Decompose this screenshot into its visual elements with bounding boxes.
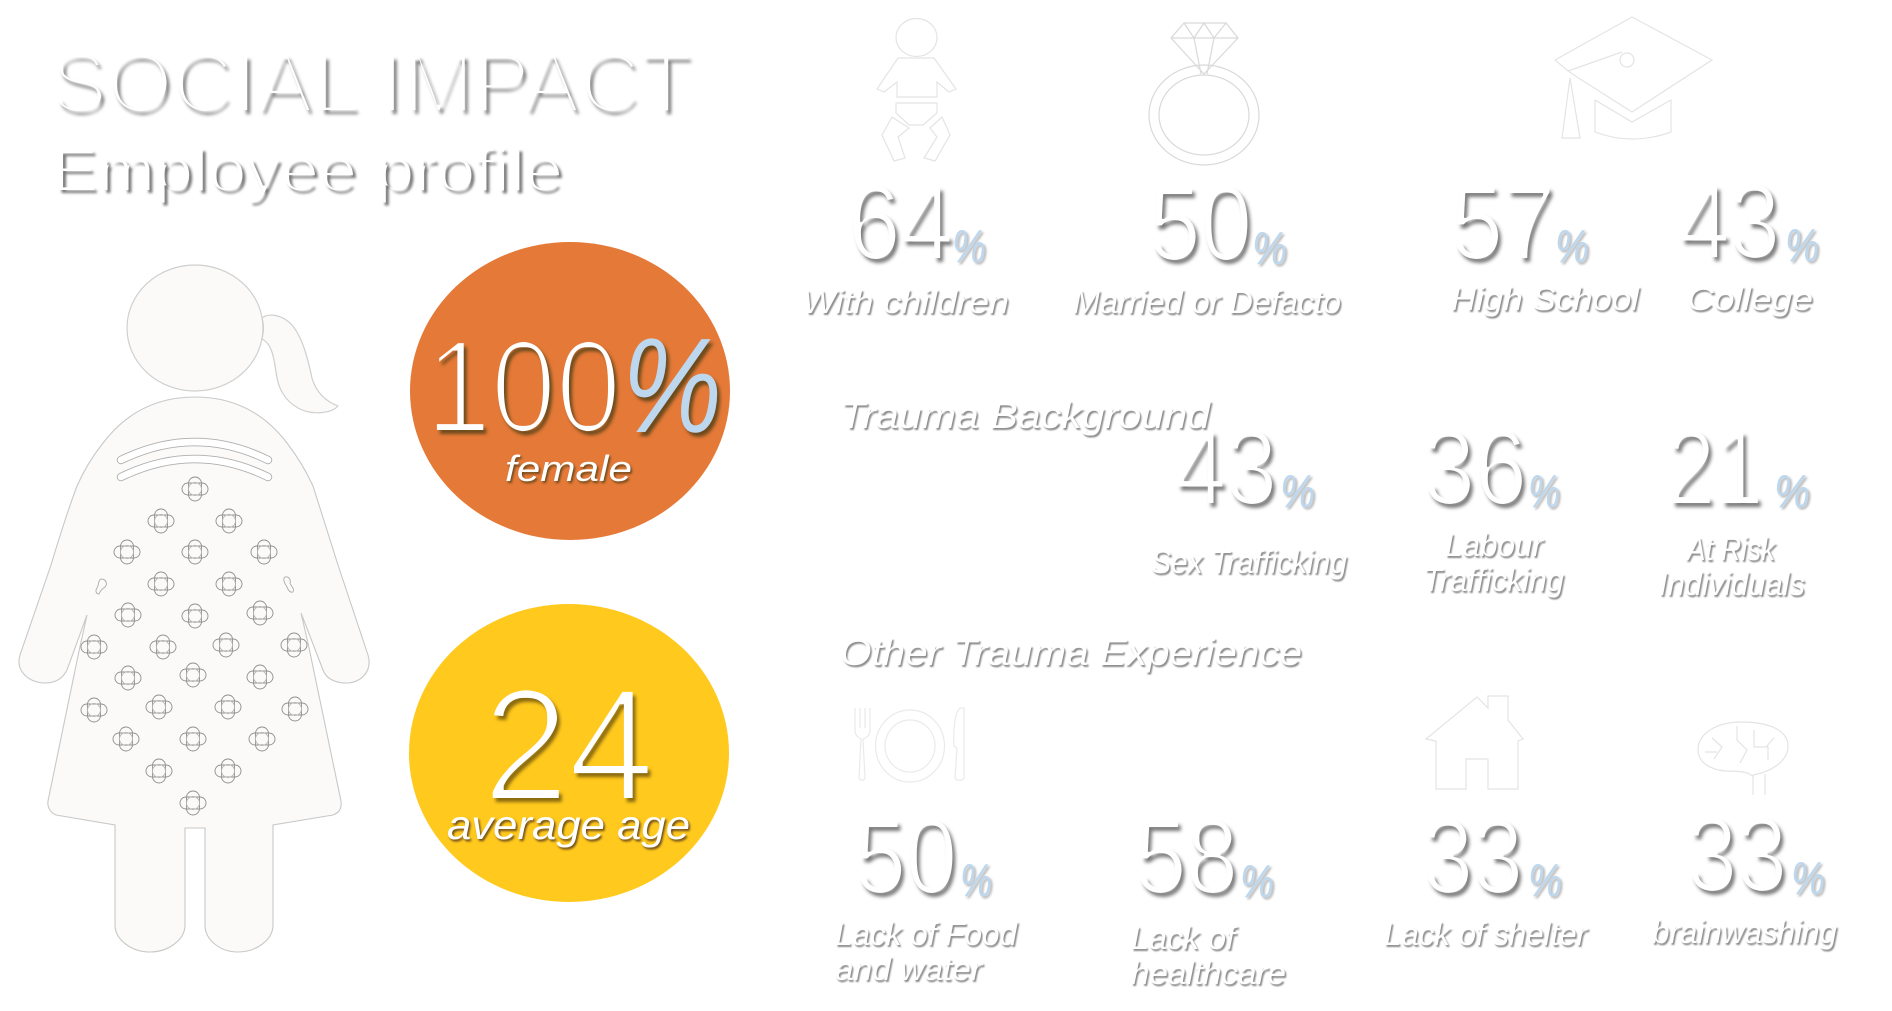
- stat: 50% lack of food and water: and water: [835, 951, 983, 987]
- stat: 64% with children: 64: [848, 164, 953, 282]
- yellow circle: [409, 604, 729, 902]
- stat: 43% sex trafficking: %: [1280, 465, 1315, 517]
- icon: baby: [877, 18, 956, 161]
- stat: 58% lack of healthcare: 58: [1135, 798, 1238, 916]
- stat: 57% high school: [1451, 164, 1640, 317]
- figure head: [127, 265, 263, 391]
- heading: other trauma experience: Other Trauma Experience: [840, 632, 1302, 673]
- stat: 21% at risk individuals: Individuals: [1659, 566, 1805, 602]
- stat: 21% at risk individuals: [1659, 409, 1810, 602]
- stat: 50% married or defacto: Married or Defacto: [1073, 284, 1341, 320]
- dress collar bands: [121, 442, 268, 477]
- figure dress and legs: [19, 397, 369, 952]
- stat: 36% labour trafficking: Trafficking: [1423, 562, 1564, 598]
- dress flower pattern: [81, 477, 308, 815]
- average age caption: average age: [447, 802, 690, 848]
- stat: 43% sex trafficking: Sex Trafficking: [1151, 544, 1347, 580]
- stat: 50% lack of food and water: 50: [855, 798, 957, 916]
- stat: 43% college: College: [1687, 281, 1813, 317]
- stat: 33% lack of shelter: [1384, 798, 1588, 952]
- stat: 58% lack of healthcare: [1131, 798, 1286, 991]
- callout: 24 average age: [409, 604, 729, 902]
- percent sign: %: [622, 310, 722, 461]
- stat: 43% sex trafficking: [1151, 409, 1347, 580]
- icon: graduation cap: [1555, 17, 1712, 139]
- stat: 64% with children: %: [952, 220, 986, 272]
- stat: 50% married or defacto: 50: [1149, 165, 1252, 283]
- stat: 21% at risk individuals: %: [1774, 465, 1810, 517]
- callout: 100% female: [410, 242, 730, 540]
- stat: 33% lack of shelter: 33: [1423, 798, 1523, 916]
- stat: 50% married or defacto: [1073, 165, 1341, 320]
- stat: 36% labour trafficking: Labour: [1445, 527, 1544, 563]
- 24 number: 24: [483, 655, 654, 834]
- stat: 50% married or defacto: %: [1252, 222, 1287, 274]
- icon: brain: [1698, 722, 1788, 795]
- panel: right-side statistics: [802, 17, 1837, 991]
- stat: 33% brainwashing: brainwashing: [1652, 914, 1837, 950]
- stat: 58% lack of healthcare: %: [1240, 855, 1274, 907]
- title: SOCIAL IMPACT: [51, 36, 692, 130]
- stat: 50% lack of food and water: Lack of Food: [835, 916, 1018, 952]
- stat: 21% at risk individuals: 21: [1667, 409, 1763, 527]
- orange circle: [410, 242, 730, 540]
- stat: 43% sex trafficking: 43: [1175, 409, 1277, 527]
- subtitle: Employee profile: [52, 137, 563, 204]
- icon: female figure with patterned dress: [19, 265, 369, 952]
- stat: 64% with children: With children: [802, 284, 1009, 320]
- stat: 57% high school: High School: [1451, 281, 1640, 317]
- heading: trauma background: Trauma Background: [840, 395, 1212, 436]
- stat: 50% lack of food and water: %: [960, 854, 992, 906]
- stat: 57% high school: 57: [1451, 164, 1555, 282]
- stat: 33% brainwashing: %: [1791, 852, 1825, 904]
- stat: 36% labour trafficking: 36: [1423, 409, 1527, 527]
- figure ponytail: [262, 315, 338, 413]
- female caption: female: [505, 448, 632, 489]
- icon: plate and cutlery: [855, 708, 964, 782]
- stat: 50% lack of food and water: [835, 798, 1018, 987]
- stat: 36% labour trafficking: %: [1528, 465, 1560, 517]
- stat: 58% lack of healthcare: healthcare: [1131, 955, 1286, 991]
- icon: house: [1426, 696, 1523, 789]
- stat: 58% lack of healthcare: Lack of: [1131, 920, 1238, 956]
- stat: 36% labour trafficking: [1423, 409, 1564, 598]
- 100 number: 100: [426, 313, 621, 460]
- stat: 43% college: 43: [1679, 163, 1780, 281]
- stat: 57% high school: %: [1555, 220, 1589, 272]
- stat: 21% at risk individuals: At Risk: [1685, 531, 1777, 567]
- stat: 43% college: %: [1785, 219, 1819, 271]
- icon: diamond ring: [1149, 23, 1259, 165]
- stat: 33% brainwashing: 33: [1687, 796, 1787, 914]
- stat: 64% with children: [802, 164, 1009, 320]
- stat: 33% lack of shelter: %: [1528, 854, 1562, 906]
- stat: 43% college: [1679, 163, 1819, 317]
- stat: 33% brainwashing: [1652, 796, 1837, 950]
- stat: 33% lack of shelter: Lack of shelter: [1384, 916, 1588, 952]
